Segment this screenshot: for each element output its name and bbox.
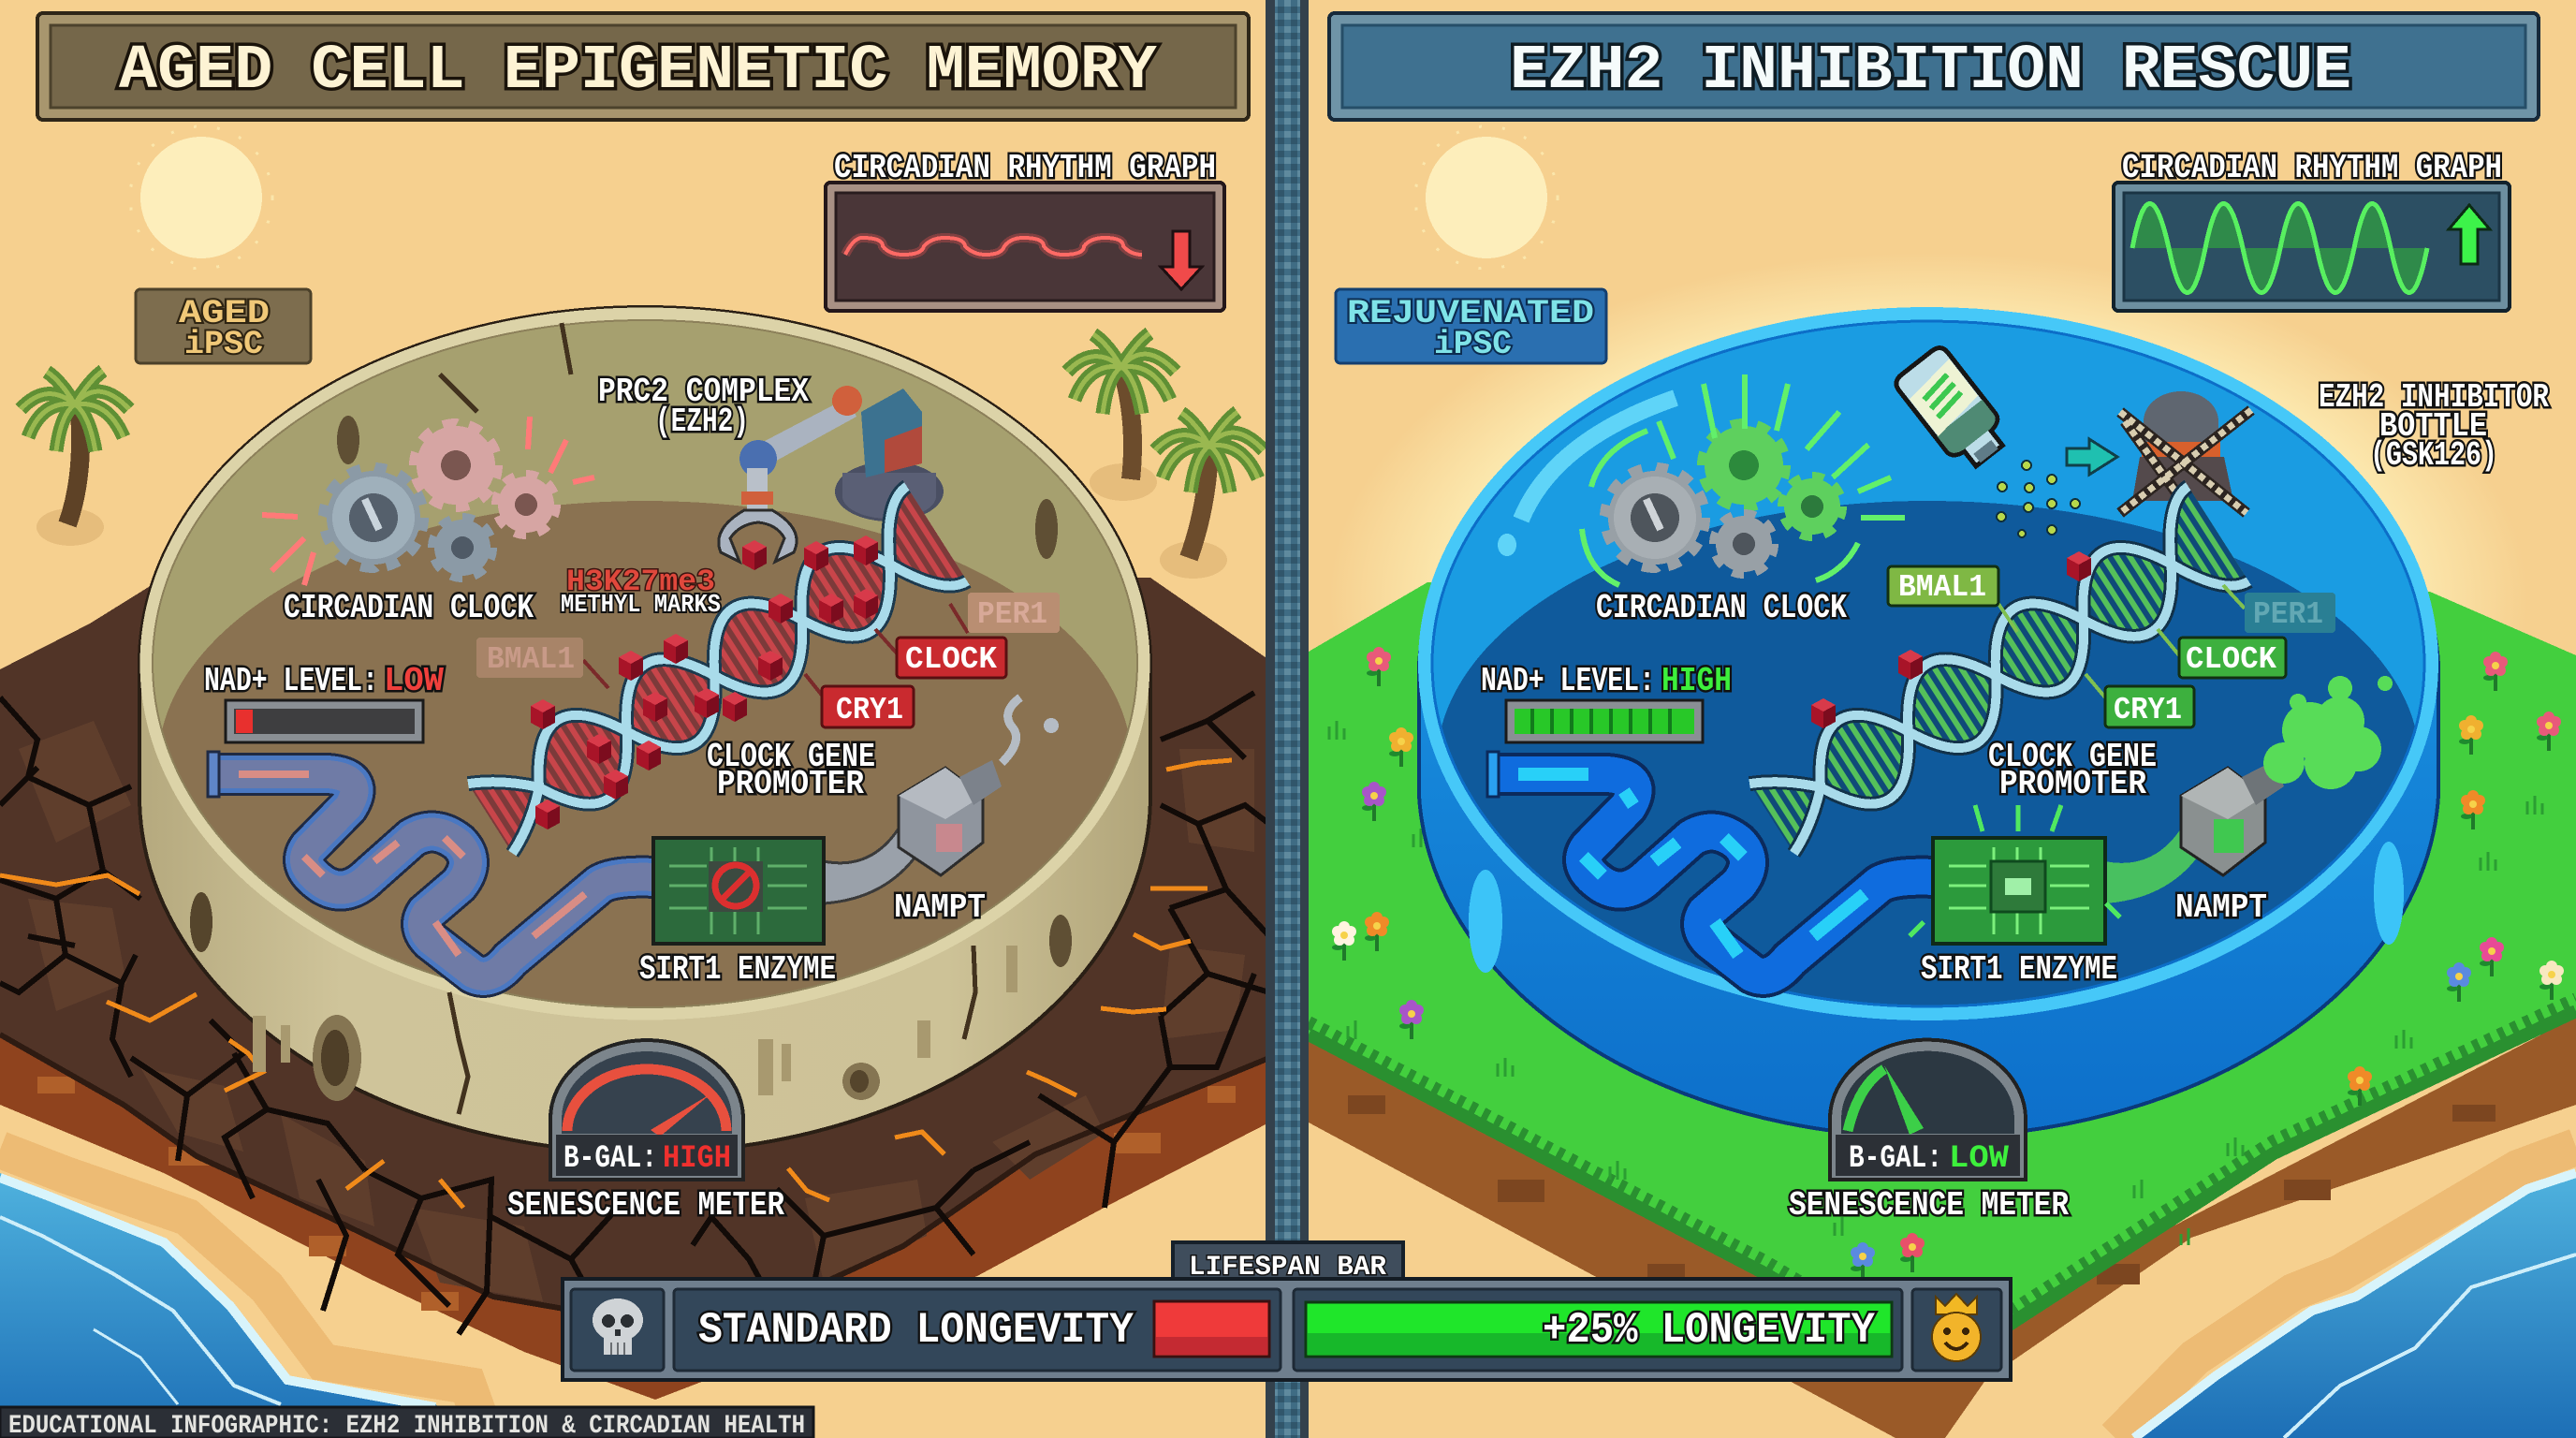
label: PRC2 complex (598, 373, 809, 441)
gears: circadian clock rejuvenated (1582, 374, 1905, 585)
petri dish: rejuvenated (1419, 300, 2439, 1180)
grey gear small (434, 520, 490, 576)
grey gear large (327, 471, 420, 565)
NAD level high: NAD+ LEVEL: (1481, 662, 1655, 700)
icon: crowned smiley (1932, 1294, 1981, 1361)
palm tree back (1067, 333, 1176, 501)
gene tags aged: PER1 (977, 597, 1047, 632)
red sparks (262, 417, 594, 585)
NAMPT machine rejuvenated (2105, 760, 2284, 903)
badge: aged iPSC: iPSC (184, 326, 263, 363)
label: H3K27me3 methyl marks: METHYL MARKS (561, 592, 721, 620)
dish outer wall blue (1419, 322, 2438, 1137)
gene tags aged (476, 593, 1060, 727)
grassy ground (1309, 582, 2576, 1438)
label: SIRT1 right: SIRT1 ENZYME (1921, 950, 2117, 989)
teal arrow (2067, 439, 2117, 475)
wet sand and water, left (0, 1150, 487, 1438)
sun left (130, 126, 272, 269)
badge: aged iPSC (136, 289, 311, 363)
label: PRC2 complex: PRC2 COMPLEX (598, 373, 809, 411)
gene tags rejuvenated: BMAL1 (1898, 570, 1986, 605)
NAD level high (1481, 662, 1732, 742)
label: clock gene promoter right: PROMOTER (1999, 765, 2146, 803)
label: senescence meter left: SENESCENCE METER (507, 1186, 784, 1225)
gene tags aged: CRY1 (836, 693, 903, 727)
lifespan tab: LIFESPAN BAR (1189, 1252, 1386, 1284)
label: clock gene promoter right: CLOCK GENE (1988, 738, 2157, 776)
green gear small (1784, 478, 1840, 535)
title panel right: EZH2 INHIBITION RESCUE (1510, 36, 2351, 107)
label: circadian clock left: CIRCADIAN CLOCK (284, 589, 534, 627)
label: SIRT1 left: SIRT1 ENZYME (639, 950, 836, 989)
gene tags aged: CLOCK (905, 642, 997, 677)
title panel left (37, 13, 1249, 120)
B-gal gauge low (1830, 1040, 2026, 1180)
dish interior blue (1419, 300, 2439, 1030)
grey gear small right (1716, 516, 1772, 572)
gauge reading high (564, 1141, 731, 1177)
label: PRC2 complex: (EZH2) (655, 403, 749, 441)
badge: aged iPSC: AGED (179, 295, 270, 332)
NAD level high: HIGH (1661, 662, 1732, 700)
SIRT1 chip aged (653, 838, 824, 944)
gene tags rejuvenated: CRY1 (2114, 693, 2182, 727)
label: clock gene promoter left: CLOCK GENE (707, 738, 875, 776)
petri dish: aged (139, 300, 1150, 1180)
gears: circadian clock aged (262, 417, 594, 585)
cracked earth ground (0, 578, 1269, 1400)
methyl mark cubes (531, 536, 878, 829)
sun right (1415, 126, 1558, 269)
residual methyl cubes (1811, 551, 2091, 728)
title panel left: AGED CELL EPIGENETIC MEMORY (119, 36, 1158, 107)
inhibitor droplets (1997, 461, 2080, 537)
dish rim blue (1425, 314, 2432, 1014)
pink gear top (417, 426, 495, 505)
label: clock gene promoter left: PROMOTER (717, 765, 864, 803)
gauge reading low: B-GAL: (1849, 1141, 1942, 1177)
label: senescence meter right: SENESCENCE METER (1789, 1186, 2069, 1225)
label: inhibitor bottle: (GSK126) (2370, 436, 2497, 475)
gene tags rejuvenated: PER1 (2253, 597, 2323, 632)
green rays (1582, 374, 1905, 585)
inhibitor bottle (1893, 344, 2013, 475)
dish glow (1359, 271, 2496, 620)
chained PRC2 machine (2120, 391, 2251, 513)
title panel right (1329, 13, 2539, 120)
pink gear small (498, 477, 554, 533)
gene tags rejuvenated (1888, 566, 2335, 727)
PRC2 robotic arm (719, 386, 944, 562)
green exhaust cloud (2263, 676, 2393, 789)
badge: rejuvenated iPSC (1336, 289, 1606, 363)
graph label left: CIRCADIAN RHYTHM GRAPH (834, 149, 1216, 187)
gene tags rejuvenated: CLOCK (2186, 642, 2276, 677)
flowers (1332, 647, 2564, 1282)
wall wear: holes, stains and cracks (190, 323, 1072, 1114)
lifespan bar (563, 1242, 2011, 1380)
label: H3K27me3 methyl marks (561, 565, 721, 620)
badge: rejuvenated iPSC: iPSC (1434, 326, 1512, 363)
label: clock gene promoter left (707, 738, 875, 803)
gauge reading high: B-GAL: (564, 1141, 657, 1177)
SIRT1 chip rejuvenated (1910, 805, 2120, 944)
dish interior (139, 300, 1150, 1030)
badge: rejuvenated iPSC: REJUVENATED (1347, 295, 1594, 332)
dish rim (146, 314, 1144, 1014)
B-gal gauge high (550, 1040, 743, 1180)
circadian graph left (826, 183, 1224, 311)
label: circadian clock right: CIRCADIAN CLOCK (1596, 589, 1847, 627)
NAMPT machine aged (824, 697, 1059, 903)
DNA helix: clock gene promoter rejuvenated (1741, 487, 2248, 866)
palm tree right (1155, 412, 1264, 579)
NAD level low: LOW (384, 662, 444, 700)
label: clock gene promoter right (1988, 738, 2157, 803)
NAD pipe rejuvenated (1487, 752, 1935, 976)
DNA helix: clock gene promoter aged (460, 487, 967, 866)
label: inhibitor bottle: BOTTLE (2379, 407, 2487, 446)
label: inhibitor bottle (2319, 378, 2549, 475)
NAD level low (204, 662, 444, 742)
panel: aged cell environment (0, 126, 1269, 1438)
grey gear large right (1608, 471, 1702, 565)
NAD pipe aged (208, 752, 655, 976)
label: NAMPT left: NAMPT (894, 888, 986, 927)
red fill block (1154, 1301, 1269, 1357)
plus 25 percent longevity text: +25% LONGEVITY (1543, 1306, 1875, 1355)
wall highlights (1469, 842, 2404, 973)
NAD level low: NAD+ LEVEL: (204, 662, 378, 700)
gauge reading low: LOW (1949, 1141, 2010, 1177)
icon: skull (593, 1299, 643, 1355)
palm tree left (21, 371, 129, 546)
label: H3K27me3 methyl marks: H3K27me3 (566, 565, 715, 599)
lifespan tab (1173, 1242, 1403, 1284)
bar frame (563, 1279, 2011, 1380)
circadian graph right (2114, 183, 2510, 311)
green gear top (1705, 426, 1783, 505)
dish outer wall (139, 307, 1150, 1152)
wet sand and water, right (2115, 1147, 2576, 1438)
label: NAMPT right: NAMPT (2175, 888, 2267, 927)
gauge reading high: HIGH (663, 1141, 731, 1177)
center divider (1266, 0, 1309, 1438)
gene tags aged: BMAL1 (487, 642, 575, 677)
green fill block (1306, 1302, 1892, 1357)
graph label right: CIRCADIAN RHYTHM GRAPH (2122, 149, 2502, 187)
panel: rejuvenated environment (1309, 126, 2576, 1438)
standard longevity text: STANDARD LONGEVITY (698, 1306, 1134, 1355)
